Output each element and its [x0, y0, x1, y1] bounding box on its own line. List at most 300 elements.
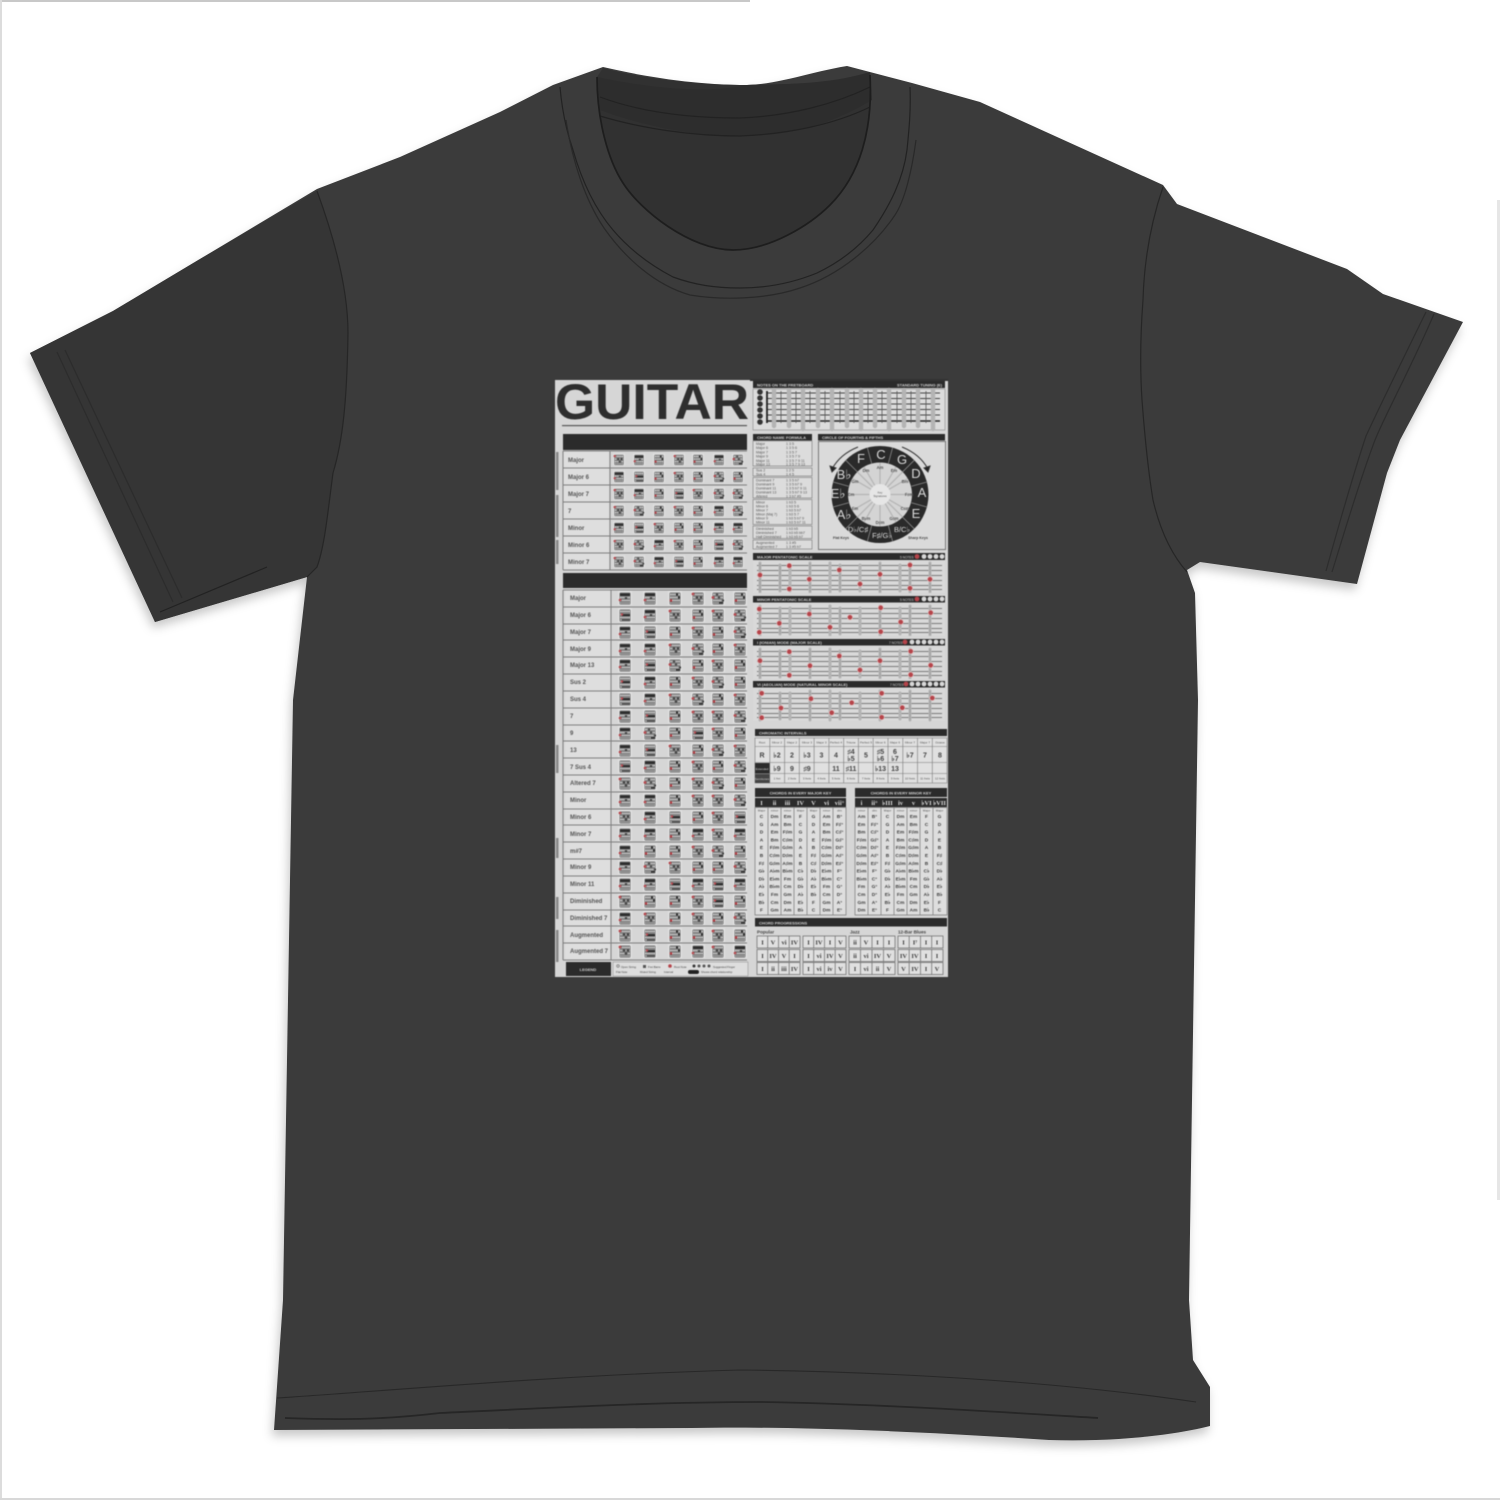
progression numerals: ii	[771, 966, 775, 973]
progression numerals: I	[761, 966, 764, 973]
legend: Muted String	[640, 970, 656, 974]
interval footer row: 8 frets	[876, 776, 885, 780]
progression numerals: V	[887, 966, 892, 973]
interval numbers	[759, 749, 942, 773]
chord rows: B♭m	[896, 884, 906, 890]
chord rows: G♯m	[908, 845, 919, 851]
formula text: 1 4 5	[786, 472, 794, 476]
chord quality row: Major	[936, 808, 943, 812]
panel: circle of fourths and fifths	[818, 434, 946, 550]
chord rows: Dm	[897, 814, 904, 820]
chord rows: C♭	[798, 869, 804, 875]
header	[755, 918, 947, 926]
formula text: 1 3 5 7	[786, 450, 797, 454]
fretboard header	[753, 381, 945, 388]
chord rows: F♯	[885, 861, 891, 867]
formula text: Major 13	[756, 462, 770, 466]
outer ring	[832, 446, 928, 543]
chord rows: Fm	[858, 884, 865, 890]
chord rows: Gm	[858, 900, 866, 906]
chord rows: C♯m	[895, 853, 906, 859]
legend: Interval	[664, 970, 674, 974]
progression numerals: vi	[816, 953, 822, 960]
formula text: 1 b3 5 b7 9	[786, 516, 804, 520]
chord rows: C	[760, 814, 764, 820]
roman numeral row: i	[861, 800, 863, 807]
formula header: CHORD NAME	[757, 435, 785, 440]
interval name row: Major 6	[890, 740, 900, 744]
header: I (IONIAN) MODE (MAJOR SCALE)	[757, 640, 823, 645]
interval footer row	[774, 776, 945, 780]
fretboard header: NOTES ON THE FRETBOARD	[757, 382, 813, 388]
interval footer row: 10 frets	[905, 776, 915, 780]
interval numbers: ♭5	[847, 755, 855, 763]
formula text	[756, 442, 807, 549]
bottom hem	[277, 1370, 1196, 1419]
chord quality row: Major	[797, 808, 804, 812]
chord rows: B	[799, 861, 803, 867]
chord rows: E	[938, 837, 942, 843]
panel: chords in every minor key	[855, 788, 947, 915]
category labels: Popular	[757, 930, 774, 934]
chord rows: E♭	[798, 900, 804, 906]
roman numeral row: I	[760, 800, 763, 807]
chord quality row: Major	[884, 808, 891, 812]
interval numbers: ♭6	[877, 755, 884, 763]
chord rows: D°	[837, 892, 842, 898]
chord rows: A°	[872, 900, 877, 906]
chord rows: A♭m	[896, 869, 906, 875]
header: 7 NOTES	[890, 683, 904, 687]
formula text: 1 3 5 7 9 11	[786, 459, 805, 463]
panel: minor pentatonic scale	[753, 596, 945, 636]
chord rows: F	[938, 900, 941, 906]
collar stitching	[560, 75, 916, 298]
chord quality row: dim	[837, 808, 842, 812]
progression numerals: ii	[876, 966, 879, 973]
left sleeve seam and hem	[57, 191, 348, 612]
chord rows: Gm	[784, 892, 792, 898]
circle of fifths diagram	[830, 446, 930, 543]
row labels: Minor 6	[570, 815, 592, 821]
panel: chord formulas	[753, 434, 812, 549]
chord rows: Bm	[823, 830, 830, 836]
table grid	[755, 808, 846, 915]
chord rows: Cm	[897, 900, 904, 906]
chord rows: E♯°	[871, 861, 878, 867]
minor keys: D♯m	[876, 520, 885, 525]
chord rows: Cm	[910, 884, 917, 890]
chord rows: B	[886, 853, 890, 859]
chord rows: A♭	[811, 876, 817, 882]
interval name row: Perfect 5	[860, 740, 872, 744]
scale diagram	[753, 647, 945, 679]
row labels: Extended	[756, 767, 769, 771]
formula text: 1 3 5 b7 9	[786, 482, 802, 486]
header	[753, 596, 945, 602]
formula text: Augmented	[756, 541, 774, 545]
chord rows: D♭	[885, 876, 891, 882]
chord rows: C	[886, 814, 890, 820]
chord rows: D	[799, 837, 803, 843]
chord quality row: minor	[897, 808, 904, 812]
chord rows: C♯	[937, 861, 943, 867]
legend: Shows chord relationship	[701, 970, 733, 974]
chord rows: B	[938, 845, 942, 851]
chord quality row: minor	[823, 808, 830, 812]
sharp keys label: Sharp Keys	[908, 536, 928, 540]
header: CHORDS IN EVERY MAJOR KEY	[770, 790, 832, 796]
formula text: Minor 6	[756, 504, 768, 508]
header	[755, 729, 947, 736]
chord rows: Cm	[858, 892, 865, 898]
chord quality row: minor	[858, 808, 865, 812]
major keys: B♭	[837, 467, 851, 482]
major keys: A	[918, 485, 927, 500]
progression numerals: ii	[853, 953, 857, 960]
row labels: Minor 7	[570, 832, 592, 838]
header: MAJOR PENTATONIC SCALE	[757, 554, 813, 560]
chord rows: C	[925, 822, 929, 828]
chord rows: Gm	[896, 908, 904, 914]
chord rows: D♭	[811, 869, 817, 875]
chord rows: B°	[837, 814, 842, 820]
interval footer row: 9 frets	[891, 776, 900, 780]
progression numerals: iii	[781, 966, 787, 973]
formula text: Augmented 7	[756, 545, 777, 549]
chord rows: B♭	[924, 908, 930, 914]
title: GUITAR	[555, 374, 749, 430]
formula header: FORMULA	[786, 435, 806, 440]
chord rows: Fm	[771, 892, 778, 898]
interval name row: Major 3	[816, 740, 827, 744]
chord rows: D♭	[937, 869, 943, 875]
chord rows: Bm	[858, 830, 865, 836]
header: 7 NOTES	[889, 641, 903, 645]
interval numbers: ♭7	[906, 752, 914, 760]
progression numerals: I	[925, 940, 928, 946]
header: VI (AEOLIAN) MODE (NATURAL MINOR SCALE)	[757, 682, 848, 687]
interval footer row: 4 frets	[817, 776, 826, 780]
interval numbers: ♭7	[891, 755, 899, 763]
chord rows: Bm	[910, 822, 917, 828]
interval name row: Minor 3	[802, 740, 812, 744]
chord rows: E♭m	[857, 869, 866, 875]
chord rows: F°	[837, 869, 842, 875]
formula text: 1 b3 b5	[786, 527, 798, 531]
interval numbers: ♯5	[877, 749, 884, 756]
panel: chromatic intervals	[755, 729, 947, 783]
chord rows: Gm	[910, 892, 918, 898]
panel: major pentatonic scale	[753, 553, 945, 593]
chord rows: Em	[784, 814, 791, 820]
interval name row: Major 2	[787, 740, 797, 744]
chord rows: E♭m	[896, 876, 905, 882]
progression numerals: I	[793, 953, 796, 960]
formula text: 1 b3 5 6	[786, 504, 799, 508]
legend: LEGEND	[580, 967, 596, 972]
formula text: Major	[756, 442, 766, 446]
formula text: Half Diminished	[756, 535, 781, 539]
formula text: Dominant 13	[756, 490, 776, 494]
chord rows: F♯m	[909, 830, 918, 836]
progression numerals: IV	[911, 966, 919, 973]
interval footer row: 3 frets	[803, 776, 812, 780]
minor keys: Am	[877, 465, 884, 470]
interval name row: Major 7	[920, 740, 930, 744]
chord rows: B♭m	[856, 876, 866, 882]
formula groups	[753, 441, 812, 549]
chord rows: F♯	[937, 853, 943, 859]
formula text: Sus 4	[756, 472, 765, 476]
formula text: 1 3 5 7 9 13	[786, 462, 805, 466]
progression numerals: IV	[791, 940, 798, 946]
chord rows: G♭	[758, 869, 765, 875]
major keys: E♭	[831, 486, 845, 501]
progression numerals: V	[782, 953, 787, 960]
chord rows: A♭	[924, 892, 930, 898]
roman numeral row: vi	[824, 800, 829, 807]
chord rows: F	[886, 908, 889, 914]
formula text: Minor 9	[756, 516, 768, 520]
chord rows: B♭m	[770, 884, 780, 890]
progression numerals: vi	[816, 966, 822, 973]
chord rows: F	[760, 908, 763, 914]
chord rows: F°	[872, 869, 877, 875]
progression numerals: I⁷	[913, 940, 917, 946]
chord rows: A♭	[759, 884, 765, 890]
chord rows: Am	[823, 814, 830, 820]
chord rows: Dm	[784, 900, 791, 906]
chord rows: A	[938, 830, 942, 836]
formula text: 1 3 5	[786, 442, 794, 446]
header: 5 NOTES	[900, 598, 914, 602]
row labels: m#7	[570, 849, 583, 855]
chord rows: D♯°	[836, 845, 843, 851]
chord rows: A	[925, 845, 929, 851]
chord rows: A°	[837, 900, 842, 906]
interval numbers: ♯4	[847, 749, 855, 756]
fretboard diagram	[753, 389, 945, 430]
major keys: C	[876, 447, 886, 462]
interval name row: Perfect 4	[830, 740, 842, 744]
progression numerals: I	[807, 966, 810, 973]
row labels: Major 9	[570, 647, 592, 653]
formula text: Minor 7	[756, 508, 768, 512]
row labels: Major	[568, 458, 585, 464]
chord rows: Am	[910, 908, 917, 914]
chord rows: D	[925, 837, 929, 843]
minor keys	[848, 465, 913, 525]
right sleeve seam and hem	[1141, 187, 1434, 572]
root notes	[757, 649, 933, 678]
row labels: 9	[570, 731, 574, 737]
chord rows: E	[886, 845, 890, 851]
chord rows: G♯m	[782, 845, 793, 851]
formula text: 1 3 5 b7 9 11	[786, 486, 807, 490]
chord rows: Cm	[771, 900, 778, 906]
chord rows: G	[886, 822, 890, 828]
chord rows: D	[812, 822, 816, 828]
interval numbers: 9	[790, 766, 794, 773]
chord rows: Em	[910, 814, 917, 820]
chord rows: B♭	[811, 892, 817, 898]
row labels: Minor	[570, 798, 587, 804]
chord rows: C♯°	[836, 830, 843, 836]
chord rows: C♯m	[821, 845, 832, 851]
chord rows: E♯°	[836, 861, 843, 867]
interval footer row: 11 frets	[920, 776, 930, 780]
chord rows: C	[938, 908, 942, 914]
category labels: 12-Bar Blues	[898, 930, 927, 934]
row labels: Augmented 7	[570, 949, 609, 955]
row labels: 7	[570, 714, 574, 720]
minor keys: Bm	[902, 479, 909, 484]
interval footer row: 7 frets	[862, 776, 871, 780]
row labels: Major 6	[570, 613, 592, 619]
header: CHORD PROGRESSIONS	[759, 920, 808, 926]
roman numeral row: ii	[773, 800, 776, 807]
progression numerals: I	[876, 940, 879, 946]
progression numerals: I	[807, 953, 810, 960]
chord rows: B♭	[885, 900, 891, 906]
interval numbers: ♭2	[773, 752, 781, 760]
chord rows: D♯m	[782, 853, 793, 859]
interval name row: Minor 2	[772, 740, 782, 744]
progression numerals: V	[838, 966, 843, 973]
progression numerals: IV	[874, 953, 881, 960]
header: 5 NOTES	[900, 556, 914, 560]
chord rows: A♭	[937, 876, 943, 882]
table grid	[855, 808, 947, 915]
row labels: Minor	[568, 526, 585, 532]
row labels: Minor 9	[570, 865, 592, 871]
chord rows: B♭m	[822, 876, 832, 882]
chord rows: F♯°	[871, 822, 878, 828]
progression numerals: I	[925, 953, 928, 960]
side margin labels	[556, 452, 558, 962]
chord rows: A	[886, 837, 890, 843]
progression numerals: IV	[815, 940, 823, 946]
formula header	[753, 434, 812, 440]
roman numeral row: IV	[797, 800, 804, 807]
chord rows: F♯m	[896, 845, 905, 851]
formula text: 1 b3 5	[786, 500, 796, 504]
chord rows: F♯m	[770, 845, 779, 851]
formula text: Minor 11	[756, 520, 770, 524]
chord rows: F♯m	[857, 837, 866, 843]
formula text: 1 3 5 7 9	[786, 455, 800, 459]
progression numerals: IV	[826, 953, 834, 960]
formula text: 1 b3 b5 b7	[786, 535, 803, 539]
formula text: Major 6	[756, 446, 768, 450]
interval numbers: 3	[820, 752, 824, 760]
row labels: Major 7	[568, 492, 590, 498]
row labels: Semitones	[755, 777, 770, 781]
interval footer row: 5 frets	[832, 776, 841, 780]
row labels: Minor 11	[570, 882, 595, 888]
row labels: Minor 7	[568, 560, 590, 566]
formula text: Major 9	[756, 455, 768, 459]
roman numeral row: vii°	[835, 800, 845, 807]
chord rows: A♯m	[908, 861, 919, 867]
circle header: CIRCLE OF FOURTHS & FIFTHS	[822, 435, 883, 440]
chord quality row	[858, 808, 943, 812]
chord rows: A	[760, 837, 764, 843]
chord rows: C°	[872, 876, 877, 882]
interval numbers: ♭13	[875, 765, 886, 773]
roman numeral row: ♭III	[882, 799, 893, 807]
interval numbers: 13	[891, 766, 899, 773]
roman numeral row: V	[811, 800, 816, 807]
chord rows: B♭	[759, 900, 765, 906]
chord rows: Am	[771, 822, 778, 828]
formula text: 1 3 5 6	[786, 446, 797, 450]
chord rows: D♯m	[821, 861, 832, 867]
chord rows: E	[760, 845, 764, 851]
chord rows: G	[938, 814, 942, 820]
progression numerals: V	[935, 966, 940, 973]
panel: aeolian mode	[753, 681, 945, 721]
formula text: 1 3 #5 b7	[786, 545, 801, 549]
formula text: Sus 2	[756, 468, 765, 472]
chord rows: Dm	[771, 814, 778, 820]
chord quality row: Major	[923, 808, 930, 812]
formula text: Dominant 11	[756, 486, 776, 490]
chord rows: Em	[858, 822, 865, 828]
minor keys: C♯m	[901, 506, 910, 511]
progression numerals: iv	[827, 966, 833, 973]
progression numerals: vi	[781, 940, 787, 946]
chord rows: C♯m	[856, 845, 867, 851]
row labels: Diminished	[570, 899, 603, 905]
progression boxes	[757, 936, 943, 974]
progression numerals: I	[936, 953, 939, 960]
major keys: F	[857, 451, 865, 466]
row labels: 13	[570, 748, 577, 754]
interval name row	[759, 740, 945, 744]
formula text: Diminished 7	[756, 531, 777, 535]
chord rows: D♭	[798, 884, 804, 890]
legend	[566, 962, 748, 976]
chord rows: G♭	[924, 876, 930, 882]
chord rows: A♭	[798, 892, 804, 898]
ring dividers	[833, 448, 927, 541]
panel: notes on the fretboard	[753, 381, 945, 430]
row labels: 7	[568, 509, 572, 515]
progression numerals: V	[838, 940, 843, 946]
legend: Flat Note	[616, 970, 628, 974]
formula text: 1 3 5 b7 9 13	[786, 490, 807, 494]
row labels: Major 6	[568, 475, 590, 481]
roman numeral row	[755, 798, 846, 807]
chord rows: F♯°	[836, 822, 843, 828]
row labels: Diminished 7	[570, 916, 608, 922]
interval numbers: 5	[864, 752, 868, 760]
chord rows: A	[812, 830, 816, 836]
interval numbers: 8	[938, 752, 942, 760]
chord rows	[856, 814, 943, 914]
chord rows: A♯°	[871, 853, 878, 859]
minor keys: Em	[891, 468, 898, 473]
interval numbers: ♭3	[803, 752, 811, 760]
chord rows: Gm	[770, 908, 778, 914]
progression numerals: I	[936, 940, 939, 946]
chord rows: C	[799, 822, 803, 828]
scale diagram	[753, 561, 945, 593]
header	[753, 639, 945, 646]
formula text: Minor (Maj 7)	[756, 512, 777, 516]
